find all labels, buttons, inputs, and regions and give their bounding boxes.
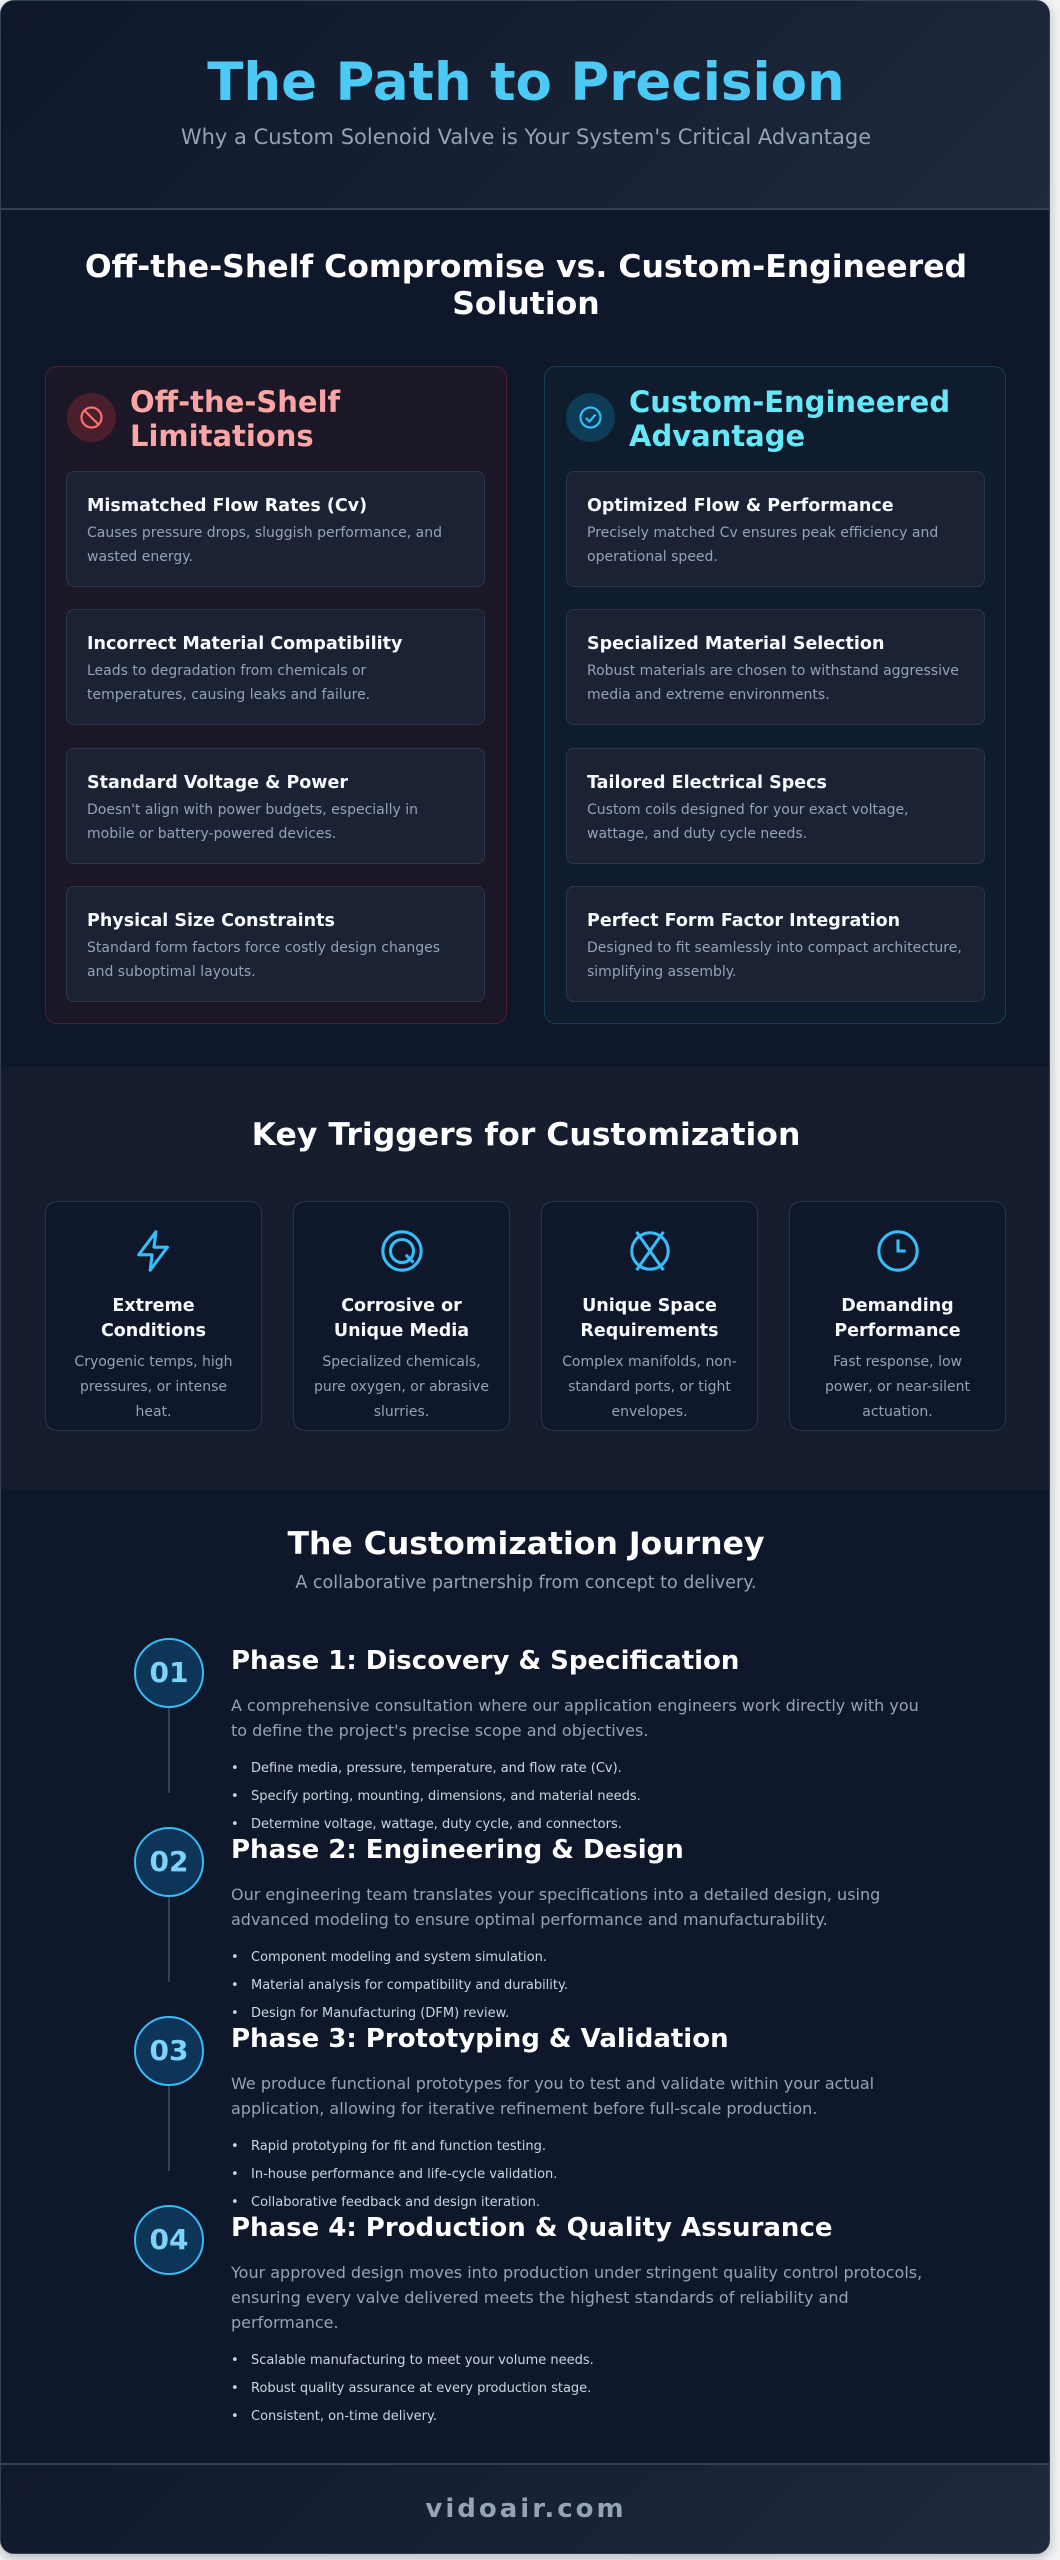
trigger: space: Unique Space: [582, 1296, 717, 1316]
panel heading: Limitations: [130, 419, 314, 453]
trigger: performance: [789, 1201, 1006, 1431]
phase 2 marker: 02: [150, 1845, 188, 1878]
phase 2: Component modeling and system simulation.: [251, 1950, 547, 1965]
trigger: performance: Demanding: [841, 1296, 954, 1316]
card: material: [66, 609, 485, 725]
card: material selection: Robust materials are chosen to withstand aggressive media and extreme environments.: [587, 663, 959, 703]
footer: [1, 2463, 1051, 2555]
card: electrical: [566, 748, 985, 864]
phase 1 marker: 01: [150, 1656, 188, 1689]
trigger: media: [293, 1201, 510, 1431]
card: electrical: Tailored Electrical Specs: [587, 773, 827, 793]
footer: vidoair.com: [425, 2494, 627, 2524]
trigger: extreme: Cryogenic temps, high pressures, or intense heat.: [74, 1354, 233, 1420]
phase 1: A comprehensive consultation where our application engineers work directly with you to define the project's precise scope and objectives.: [231, 1696, 919, 1740]
phase 3 marker: 03: [150, 2034, 188, 2067]
phase 1: Define media, pressure, temperature, and flow rate (Cv).: [251, 1761, 622, 1776]
phase 4: Your approved design moves into production under stringent quality control protocols, ensuring every valve delivered meets the highest standards of reliability and performance.: [231, 2263, 922, 2332]
trigger: extreme: Conditions: [101, 1321, 206, 1341]
card: material selection: [566, 609, 985, 725]
icon: prohibited: [67, 393, 116, 442]
panel: off-the-shelf: [45, 366, 507, 1024]
phase 2: Material analysis for compatibility and durability.: [251, 1978, 568, 1993]
trigger: performance: Performance: [834, 1321, 961, 1341]
card: flow: Mismatched Flow Rates (Cv): [87, 496, 367, 516]
panel heading: [629, 385, 950, 453]
panel heading: Advantage: [629, 419, 805, 453]
card: optimized: [566, 471, 985, 587]
phase 3: In-house performance and life-cycle validation.: [251, 2167, 557, 2182]
phase 4: Robust quality assurance at every production stage.: [251, 2381, 591, 2396]
phase 3: Phase 3: Prototyping & Validation: [231, 2024, 729, 2054]
journey subtitle: A collaborative partnership from concept to delivery.: [295, 1573, 757, 1593]
card: form factor: Perfect Form Factor Integration: [587, 911, 900, 931]
phase 2: Our engineering team translates your specifications into a detailed design, using advanced modeling to ensure optimal performance and manufacturability.: [231, 1885, 880, 1929]
panel heading: Custom-Engineered: [629, 385, 950, 419]
subtitle: Why a Custom Solenoid Valve is Your System's Critical Advantage: [181, 125, 871, 149]
card: size: [66, 886, 485, 1002]
phase 3: Collaborative feedback and design iteration.: [251, 2195, 540, 2210]
phase 1 marker: [134, 1638, 204, 1708]
comparison heading: Solution: [452, 286, 600, 322]
phase 4 marker: 04: [150, 2223, 188, 2256]
phase 4: Phase 4: Production & Quality Assurance: [231, 2213, 832, 2243]
panel heading: [130, 385, 340, 453]
phase 1: Specify porting, mounting, dimensions, and material needs.: [251, 1789, 641, 1804]
phase 4 marker: [134, 2205, 204, 2275]
phase 4: [231, 2213, 922, 2424]
card: voltage: [66, 748, 485, 864]
phase 4: Consistent, on-time delivery.: [251, 2409, 437, 2424]
card: voltage: Standard Voltage & Power: [87, 773, 348, 793]
card: electrical: Custom coils designed for your exact voltage, wattage, and duty cycle needs.: [587, 802, 909, 842]
trigger: space: Complex manifolds, non-standard ports, or tight envelopes.: [562, 1354, 737, 1420]
phase 2: Design for Manufacturing (DFM) review.: [251, 2006, 509, 2021]
trigger: media: Unique Media: [334, 1321, 469, 1341]
phase 3: Rapid prototyping for fit and function testing.: [251, 2139, 546, 2154]
card: optimized: Precisely matched Cv ensures peak efficiency and operational speed.: [587, 525, 938, 565]
panel: custom: [544, 366, 1006, 1024]
trigger: space: Requirements: [580, 1321, 719, 1341]
card: material selection: Specialized Material Selection: [587, 634, 884, 654]
triggers heading: Key Triggers for Customization: [252, 1117, 800, 1153]
icon: check: [566, 393, 615, 442]
header: [1, 1, 1051, 210]
card: material: Leads to degradation from chemicals or temperatures, causing leaks and failure.: [87, 663, 370, 703]
triggers section: [1, 1067, 1051, 1489]
phase 4: Scalable manufacturing to meet your volume needs.: [251, 2353, 594, 2368]
card: size: Physical Size Constraints: [87, 911, 335, 931]
phase 3 marker: [134, 2016, 204, 2086]
trigger: space: [541, 1201, 758, 1431]
card: form factor: Designed to fit seamlessly into compact architecture, simplifying assembly.: [587, 940, 962, 980]
trigger: media: Corrosive or: [341, 1296, 462, 1316]
phase 2 marker: [134, 1827, 204, 1897]
trigger: media: Specialized chemicals, pure oxygen, or abrasive slurries.: [314, 1354, 489, 1420]
card: size: Standard form factors force costly design changes and suboptimal layouts.: [87, 940, 440, 980]
phase 3: We produce functional prototypes for you to test and validate within your actual application, allowing for iterative refinement before full-scale production.: [231, 2074, 874, 2118]
phase 2: Phase 2: Engineering & Design: [231, 1835, 684, 1865]
card: form factor: [566, 886, 985, 1002]
journey heading: The Customization Journey: [288, 1526, 764, 1562]
card: flow: [66, 471, 485, 587]
phase 1: Determine voltage, wattage, duty cycle, and connectors.: [251, 1817, 622, 1832]
phase 3: [231, 2024, 874, 2210]
comparison heading: [85, 249, 967, 322]
panel heading: Off-the-Shelf: [130, 385, 340, 419]
trigger: extreme: [45, 1201, 262, 1431]
trigger: extreme: Extreme: [112, 1296, 195, 1316]
card: optimized: Optimized Flow & Performance: [587, 496, 894, 516]
card: voltage: Doesn't align with power budgets, especially in mobile or battery-powered devices.: [87, 802, 418, 842]
card: flow: Causes pressure drops, sluggish performance, and wasted energy.: [87, 525, 442, 565]
card: material: Incorrect Material Compatibility: [87, 634, 402, 654]
phase 1: Phase 1: Discovery & Specification: [231, 1646, 739, 1676]
title: The Path to Precision: [207, 52, 845, 113]
phase 1: [231, 1646, 919, 1832]
phase 2: [231, 1835, 880, 2021]
comparison heading: Off-the-Shelf Compromise vs. Custom-Engineered: [85, 249, 967, 285]
trigger: performance: Fast response, low power, or near-silent actuation.: [825, 1354, 970, 1420]
